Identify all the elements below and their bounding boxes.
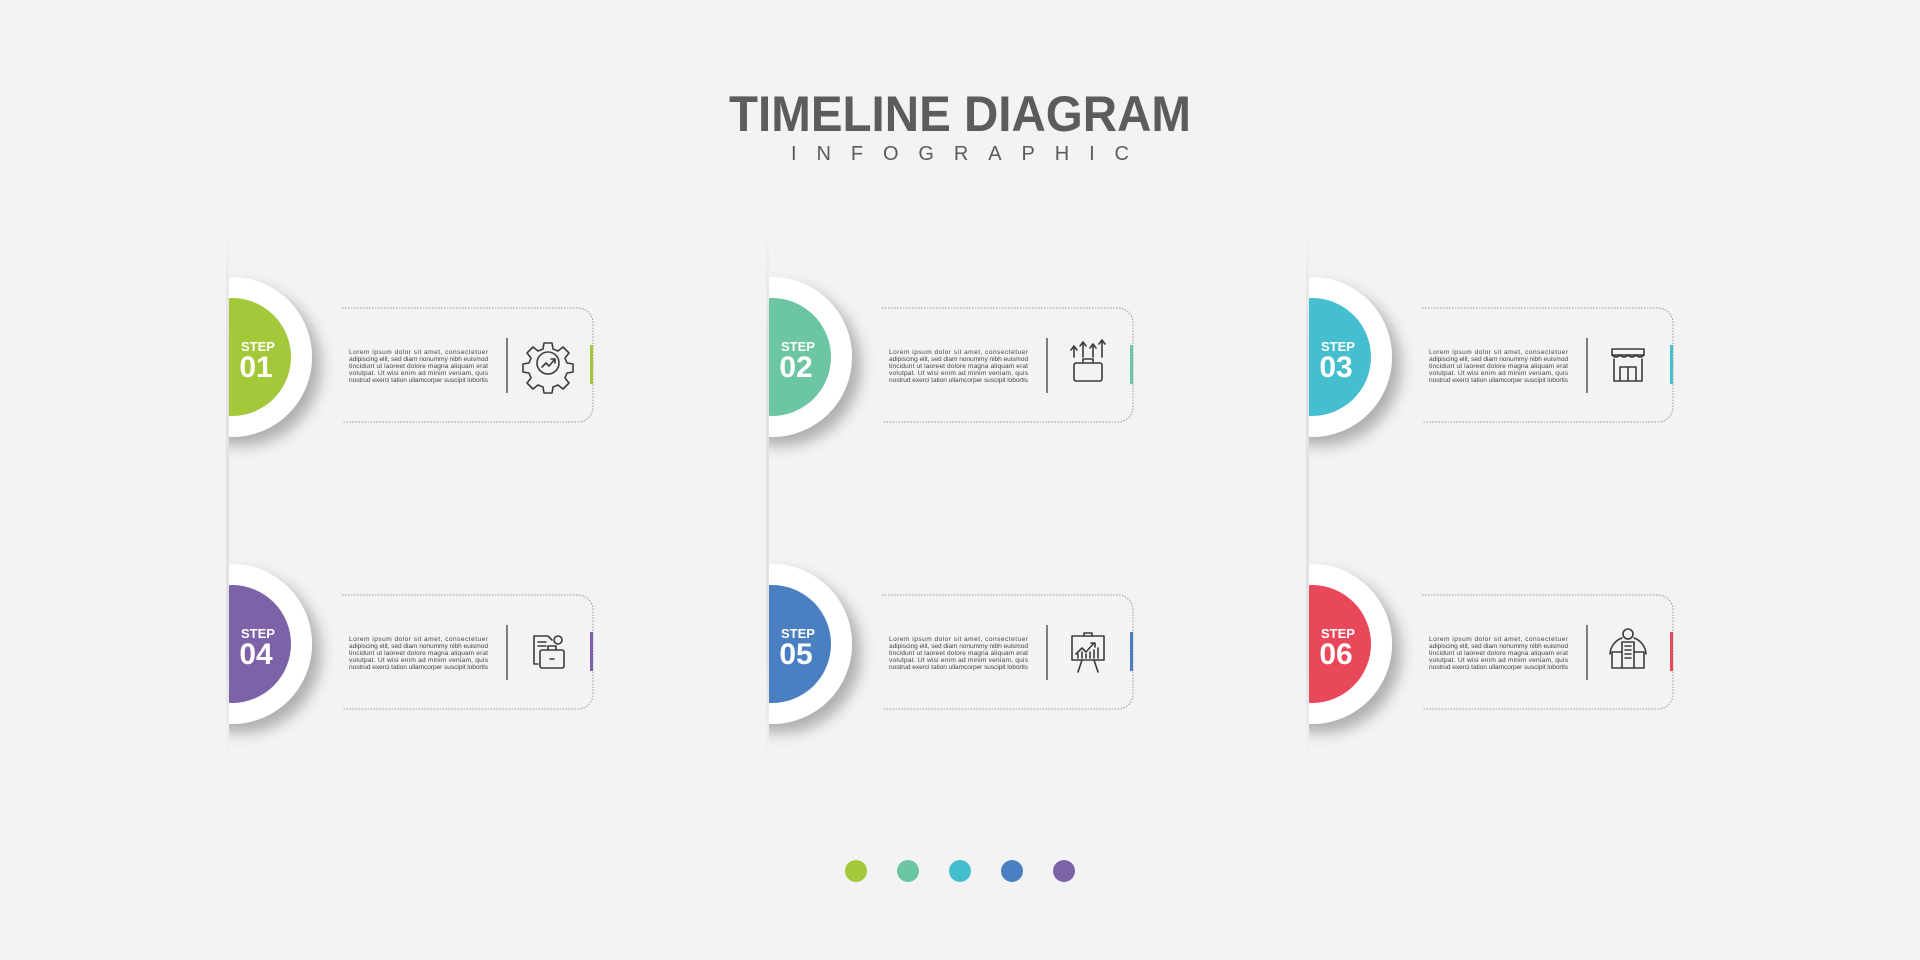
text block: [889, 349, 1029, 384]
text block: volutpat. Ut wisi enim ad minim veniam, quis: [349, 657, 489, 664]
badge: step 03: [1309, 277, 1408, 454]
badge: step 04: STEP: [241, 626, 275, 641]
text block: Lorem ipsum dolor sit amet, consectetuer: [889, 636, 1029, 643]
card: [1422, 595, 1673, 709]
text block: tincidunt ut laoreet dolore magna aliquam erat: [1429, 363, 1568, 370]
progress dots: [845, 860, 1075, 882]
badge: step 04: [229, 564, 328, 740]
step 06: [1232, 564, 1673, 724]
text block: tincidunt ut laoreet dolore magna aliquam erat: [349, 363, 488, 370]
icon: bank building with coin: [1610, 629, 1646, 668]
badge: step 01: [229, 277, 328, 454]
text block: nostrud exerci tation ullamcorper suscipit lobortis: [1429, 664, 1569, 671]
step 03: [1232, 277, 1673, 437]
card: [1422, 308, 1673, 422]
icon: gear with chart: [523, 343, 573, 393]
text block: tincidunt ut laoreet dolore magna aliquam erat: [889, 363, 1028, 370]
column edge strips: [226, 226, 1309, 766]
text block: Lorem ipsum dolor sit amet, consectetuer: [889, 349, 1029, 356]
icon: presentation board: [1072, 633, 1104, 672]
badge: step 01: STEP: [241, 339, 275, 354]
text block: adipiscing elit, sed diam nonummy nibh euismod: [349, 356, 488, 363]
subtitle: INFOGRAPHIC: [791, 143, 1129, 165]
text block: volutpat. Ut wisi enim ad minim veniam, quis: [889, 370, 1029, 377]
text block: Lorem ipsum dolor sit amet, consectetuer: [1429, 349, 1569, 356]
text block: adipiscing elit, sed diam nonummy nibh euismod: [889, 356, 1028, 363]
badge: step 02: STEP: [781, 339, 815, 354]
badge: step 03: 03: [1319, 351, 1353, 384]
text block: Lorem ipsum dolor sit amet, consectetuer: [349, 349, 489, 356]
text block: [1429, 636, 1569, 671]
text block: adipiscing elit, sed diam nonummy nibh euismod: [349, 643, 488, 650]
text block: Lorem ipsum dolor sit amet, consectetuer: [349, 636, 489, 643]
icon: shop: [1612, 349, 1644, 381]
badge: step 03: STEP: [1321, 339, 1355, 354]
text block: adipiscing elit, sed diam nonummy nibh euismod: [889, 643, 1028, 650]
text block: [1429, 349, 1569, 384]
title: TIMELINE DIAGRAM: [729, 86, 1191, 142]
text block: volutpat. Ut wisi enim ad minim veniam, quis: [889, 657, 1029, 664]
text block: nostrud exerci tation ullamcorper suscipit lobortis: [1429, 377, 1569, 384]
text block: nostrud exerci tation ullamcorper suscipit lobortis: [349, 377, 489, 384]
text block: tincidunt ut laoreet dolore magna aliquam erat: [349, 650, 488, 657]
card: [882, 595, 1133, 709]
text block: adipiscing elit, sed diam nonummy nibh euismod: [1429, 643, 1568, 650]
badge: step 02: 02: [779, 351, 813, 384]
text block: [349, 349, 489, 384]
card: [342, 308, 593, 422]
badge: step 05: STEP: [781, 626, 815, 641]
text block: adipiscing elit, sed diam nonummy nibh euismod: [1429, 356, 1568, 363]
badge: step 06: [1309, 564, 1408, 740]
step 04: [152, 564, 593, 724]
text block: volutpat. Ut wisi enim ad minim veniam, quis: [1429, 370, 1569, 377]
step 01: [152, 277, 593, 437]
text block: nostrud exerci tation ullamcorper suscipit lobortis: [889, 664, 1029, 671]
badge: step 05: [769, 564, 868, 740]
text block: tincidunt ut laoreet dolore magna aliquam erat: [1429, 650, 1568, 657]
card: [882, 308, 1133, 422]
step 02: [692, 277, 1133, 437]
badge: step 04: 04: [239, 638, 273, 671]
badge: step 06: STEP: [1321, 626, 1355, 641]
text block: nostrud exerci tation ullamcorper suscipit lobortis: [889, 377, 1029, 384]
badge: step 06: 06: [1319, 638, 1353, 671]
text block: nostrud exerci tation ullamcorper suscipit lobortis: [349, 664, 489, 671]
badge: step 01: 01: [239, 351, 273, 384]
text block: volutpat. Ut wisi enim ad minim veniam, quis: [1429, 657, 1569, 664]
badge: step 02: [769, 277, 868, 454]
text block: [349, 636, 489, 671]
text block: tincidunt ut laoreet dolore magna aliquam erat: [889, 650, 1028, 657]
badge: step 05: 05: [779, 638, 813, 671]
card: [342, 595, 593, 709]
text block: [889, 636, 1029, 671]
icon: briefcase with arrows: [1071, 340, 1105, 381]
text block: Lorem ipsum dolor sit amet, consectetuer: [1429, 636, 1569, 643]
text block: volutpat. Ut wisi enim ad minim veniam, quis: [349, 370, 489, 377]
step 05: [692, 564, 1133, 724]
icon: documents and briefcase: [534, 636, 564, 668]
